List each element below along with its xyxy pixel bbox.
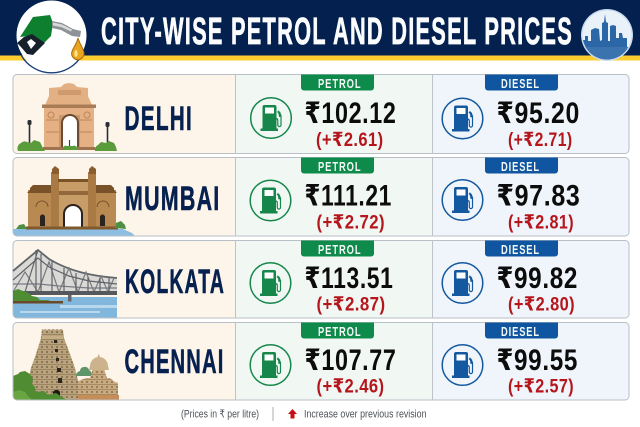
petrol price: ₹113.51: [304, 262, 394, 295]
illustration: Howrah Bridge: [13, 250, 117, 304]
petrol price: PETROL: [318, 325, 362, 339]
petrol price: PETROL: [318, 160, 362, 174]
diesel price: (+₹2.57): [508, 376, 574, 398]
petrol price: ₹107.77: [304, 344, 396, 377]
footer note: Increase over previous revision: [304, 408, 426, 420]
diesel price: (+₹2.80): [508, 294, 575, 316]
city name: CHENNAI: [124, 343, 224, 381]
petrol price: ₹102.12: [304, 97, 396, 130]
row: Chennai: [13, 322, 629, 400]
city name: MUMBAI: [125, 180, 220, 218]
petrol price: (+₹2.61): [316, 129, 384, 151]
diesel price: DIESEL: [501, 325, 540, 339]
diesel price: DIESEL: [501, 243, 540, 257]
petrol price: [250, 240, 394, 316]
petrol price: PETROL: [318, 77, 362, 91]
icon: city skyline badge: [581, 9, 633, 63]
petrol price: [250, 322, 396, 398]
petrol price: [251, 74, 396, 151]
row: Mumbai: [13, 158, 629, 236]
petrol price: [250, 158, 392, 234]
petrol price: PETROL: [318, 243, 362, 257]
petrol price: (+₹2.72): [316, 212, 385, 234]
header banner: [0, 0, 640, 60]
diesel price: [442, 240, 578, 316]
diesel price: DIESEL: [501, 160, 540, 174]
diesel price: ₹97.83: [496, 180, 580, 212]
diesel price: ₹99.55: [496, 344, 578, 377]
diesel price: [442, 322, 578, 398]
petrol price: ₹111.21: [304, 180, 392, 212]
petrol price: (+₹2.46): [316, 376, 384, 398]
diesel price: [442, 158, 580, 234]
illustration: Chennai temple: [13, 329, 119, 400]
footer note: (Prices in ₹ per litre): [181, 408, 259, 420]
diesel price: ₹99.82: [496, 262, 578, 295]
diesel price: ₹95.20: [496, 97, 580, 130]
city name: KOLKATA: [125, 263, 225, 301]
row: Delhi: [13, 74, 629, 154]
diesel price: (+₹2.71): [508, 129, 572, 151]
diesel price: (+₹2.81): [508, 212, 574, 234]
icon: petrol nozzle badge: [16, 0, 86, 73]
row: Kolkata: [13, 240, 629, 318]
diesel price: DIESEL: [501, 77, 540, 91]
footer note: [181, 407, 426, 421]
petrol price: (+₹2.87): [316, 294, 386, 316]
city name: DELHI: [124, 100, 193, 138]
illustration: Gateway of India: [16, 166, 126, 230]
diesel price: [442, 74, 580, 151]
icon: red up arrow: [288, 409, 297, 418]
illustration: India Gate: [17, 83, 117, 151]
